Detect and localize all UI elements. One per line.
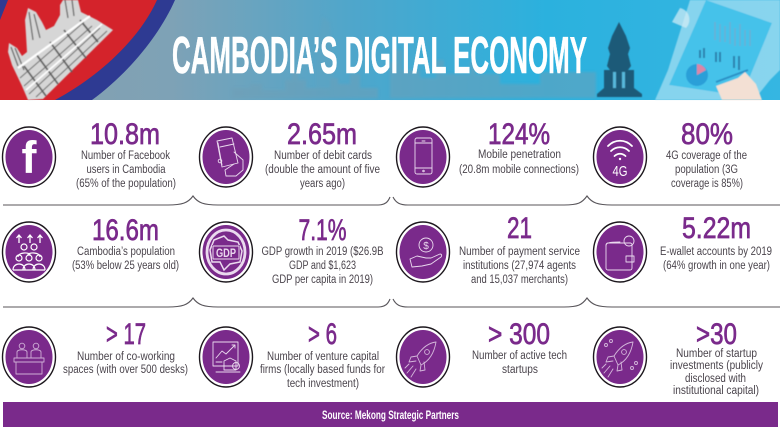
description: Facebook users: (65% of the population): [76, 178, 176, 190]
icon: hand holding coin: [396, 222, 450, 282]
description: 4G coverage: coverage is 85%): [671, 178, 743, 190]
stat: 21: 21: [507, 212, 532, 245]
description: Facebook users: [76, 150, 176, 190]
description: population: Cambodia’s population: [77, 246, 175, 258]
stat: 2.65m: 2.65m: [287, 118, 357, 151]
icon: GDP globe: GDP: [216, 246, 236, 260]
description: GDP growth: GDP and $1,623: [289, 260, 356, 272]
icon: smartphone: [396, 127, 450, 187]
description: 4G coverage: population (3G: [675, 164, 738, 176]
icon: Angkor Wat emblem: [8, 0, 113, 100]
icon: 4G wifi: [594, 127, 646, 187]
stat: 5.22m: 5.22m: [682, 212, 751, 245]
panel: 4G coverage: [594, 118, 747, 190]
skyline silhouette: [232, 16, 596, 98]
description: GDP growth: GDP per capita in 2019): [272, 274, 373, 286]
description: population: (53% below 25 years old): [72, 260, 179, 272]
description: GDP growth: [262, 246, 384, 286]
description: debit cards: (double the amount of five: [265, 164, 380, 176]
description: active tech startups: [472, 350, 567, 376]
description: debit cards: years ago): [300, 178, 345, 190]
panel: co-working spaces: [2, 318, 188, 387]
panel: population: [2, 214, 179, 282]
description: co-working spaces: Number of co-working: [77, 351, 175, 363]
description: 4G coverage: 4G coverage of the: [666, 150, 747, 162]
description: payment institutions: Number of payment service: [459, 246, 580, 258]
description: startup investments: investments (publicly: [670, 360, 763, 372]
icon: chart board and buildings: [200, 327, 252, 387]
description: payment institutions: institutions (27,974 agents: [463, 260, 576, 272]
description: venture capital firms: Number of venture capital: [267, 351, 379, 363]
description: e-wallet accounts: [660, 246, 772, 272]
stat: >30: >30: [696, 318, 737, 351]
icon: independence monument: [597, 22, 642, 97]
icon: hand on tablet: [716, 72, 762, 100]
stat: 16.6m: 16.6m: [92, 214, 159, 247]
description: startup investments: Number of startup: [676, 348, 757, 360]
description: startup investments: disclosed with: [685, 373, 746, 385]
stat: 7.1%: 7.1%: [298, 214, 346, 247]
description: venture capital firms: [260, 351, 385, 390]
description: mobile penetration: Mobile penetration: [478, 149, 561, 161]
description: Facebook users: users in Cambodia: [86, 164, 166, 176]
description: Facebook users: Number of Facebook: [81, 150, 170, 162]
panel: payment institutions: [396, 212, 580, 286]
description: mobile penetration: (20.8m mobile connections): [459, 164, 579, 176]
description: 4G coverage: [666, 150, 747, 190]
icon: Facebook: f: [22, 132, 38, 183]
source bar: [3, 402, 778, 427]
icon: GDP globe: [200, 222, 252, 282]
icon: hand holding coin: $: [423, 241, 429, 252]
source bar: Source: Mekong Strategic Partners: [322, 410, 459, 422]
description: co-working spaces: [63, 351, 188, 376]
stat: 80%: 80%: [681, 118, 733, 151]
stat: > 6: > 6: [308, 318, 337, 351]
icon: 4G wifi: 4G: [612, 163, 628, 180]
icon: hand holding card: [200, 127, 252, 187]
description: active tech startups: Number of active tech: [472, 350, 567, 362]
panel: venture capital firms: [200, 318, 385, 390]
description: payment institutions: [459, 246, 580, 286]
description: mobile penetration: [459, 149, 579, 176]
header banner: [0, 0, 780, 100]
description: debit cards: [265, 150, 380, 190]
stat: > 17: > 17: [106, 318, 146, 351]
description: GDP growth: GDP growth in 2019 ($26.9B: [262, 246, 384, 258]
description: debit cards: Number of debit cards: [274, 150, 372, 162]
panel: active tech startups: [396, 318, 567, 387]
panel: debit cards: [200, 118, 380, 190]
icon: rocket with coins: [594, 327, 646, 387]
description: active tech startups: startups: [502, 364, 538, 376]
stat: > 300: > 300: [488, 318, 550, 351]
icon: people at desk: [2, 327, 56, 387]
panel: e-wallet accounts: [594, 212, 772, 282]
icon: rocket: [396, 327, 450, 387]
panel: Facebook users: [2, 118, 176, 190]
stat: 10.8m: 10.8m: [90, 118, 160, 151]
panel: mobile penetration: [396, 118, 579, 187]
description: payment institutions: and 15,037 merchants): [471, 274, 568, 286]
stat: 124%: 124%: [488, 118, 550, 151]
description: co-working spaces: spaces (with over 500 desks): [63, 364, 188, 376]
icon: people with arrows: [2, 222, 56, 282]
panel: GDP growth: [200, 214, 384, 286]
description: venture capital firms: firms (locally based funds for: [260, 364, 385, 376]
description: startup investments: [670, 348, 763, 397]
icon: wallet and coin: [594, 222, 646, 282]
description: venture capital firms: tech investment): [287, 378, 359, 390]
icon: tablet with charts: [655, 0, 780, 100]
flag: blue bands: [0, 0, 175, 100]
description: startup investments: institutional capital): [673, 385, 759, 397]
flag: red field: [0, 0, 157, 100]
description: population: [72, 246, 179, 272]
panel: startup investments: [594, 318, 763, 397]
icon: Facebook: [2, 127, 56, 187]
